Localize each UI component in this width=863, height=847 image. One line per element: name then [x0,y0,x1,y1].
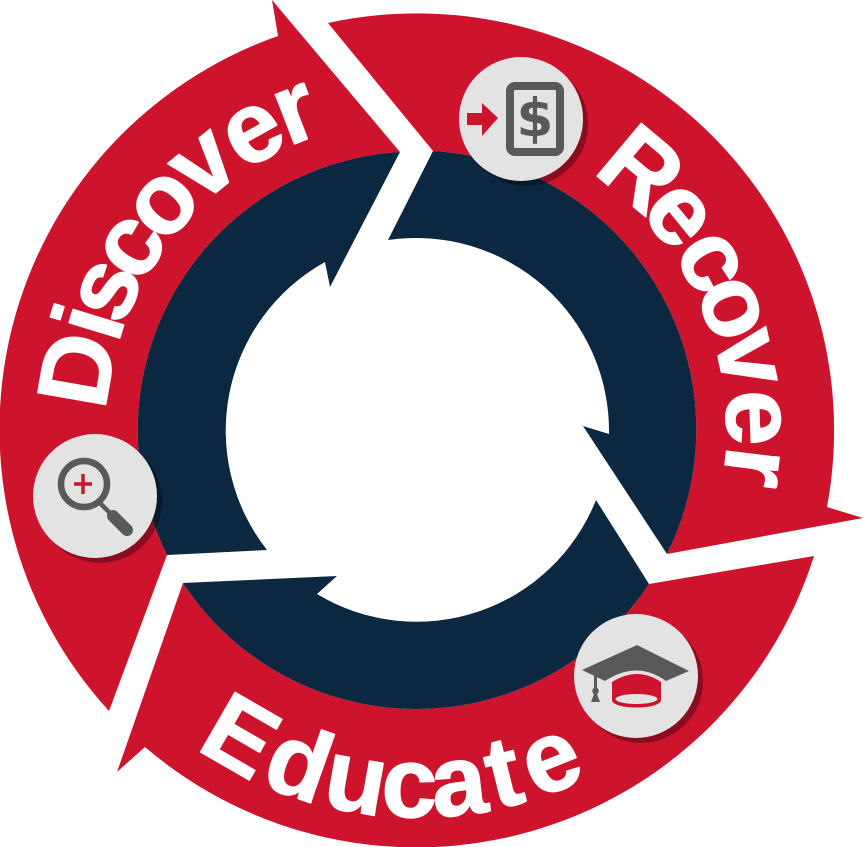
navy arrow segment: right [388,151,696,554]
heading: Recover: Recover [578,103,818,494]
icon: graduation cap [574,614,703,743]
navy arrow segment: bottom [183,500,649,709]
heading: Educate: Educate [184,671,596,840]
red arrow segment: discover [0,0,400,711]
red arrow segment: recover [328,13,863,554]
heading: Discover: Discover [16,48,332,415]
icon: magnifying glass [33,434,162,563]
icon: money in [459,57,588,186]
red arrow segment: educate [117,556,814,847]
navy arrow segment: left [138,152,400,555]
icon: money in: $ [517,88,553,149]
